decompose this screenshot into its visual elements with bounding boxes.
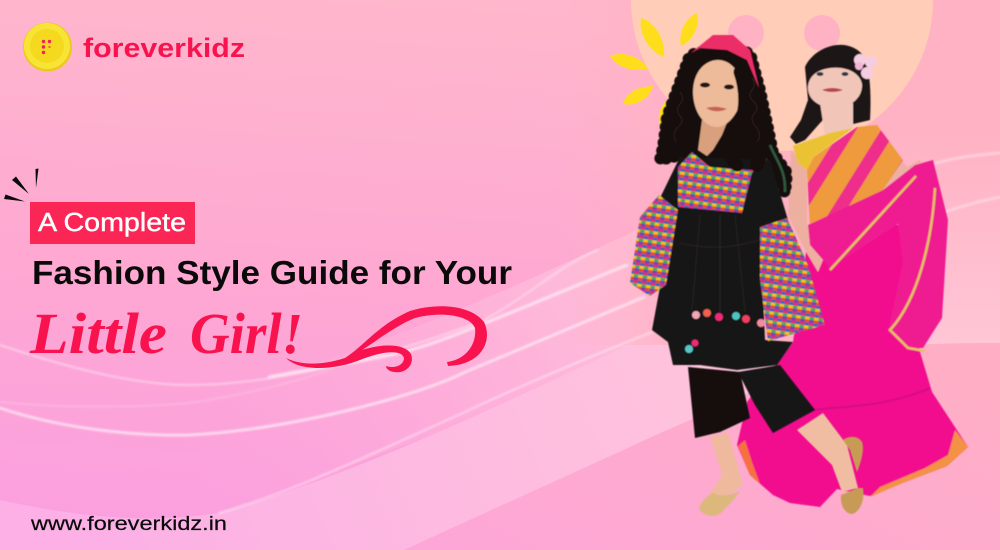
front hair curls: [686, 72, 760, 165]
face and neck: [808, 68, 862, 136]
shoe right: [841, 437, 863, 514]
hair curls back: [660, 48, 787, 193]
label: A Complete: [30, 202, 195, 244]
skirt: [737, 225, 968, 507]
skirt hem orange: [870, 430, 968, 497]
right side lower wash: [880, 130, 1000, 345]
pants right leg: [738, 365, 815, 433]
background band lower: [0, 260, 800, 550]
icon: yellow button: [23, 22, 72, 72]
yellow blouse: [793, 128, 853, 170]
logo: foreverkidz: [23, 22, 245, 72]
background white light waves: [0, 153, 1000, 513]
skirt ruffle seam: [800, 388, 930, 412]
eyes and mouth: [816, 72, 848, 92]
tunic pleats: [680, 215, 760, 312]
colorful yoke: [678, 152, 768, 213]
pink dots on sun: [728, 15, 840, 51]
left sleeve: [630, 195, 678, 296]
headband: [691, 35, 759, 88]
label: A Complete: A Complete: [38, 207, 186, 237]
eyes and mouth: [700, 82, 734, 111]
right side wash: [560, 0, 1000, 345]
icon: black spark lines: [4, 168, 38, 202]
heading: Fashion Style Guide for Your: Fashion Style Guide for Your: [32, 254, 512, 291]
peach sun circle: [631, 0, 933, 151]
gold trim: [830, 176, 935, 351]
website url: www.foreverkidz.in: [30, 514, 227, 535]
face: [693, 60, 742, 127]
waist skin: [820, 205, 892, 240]
decorative flourish: [286, 306, 487, 372]
icon: yellow leaves: [610, 13, 698, 131]
script heading: Little Girl!: [29, 301, 303, 366]
right sleeve: [760, 218, 825, 341]
script heading: Little Girl!: Little: [29, 301, 167, 366]
script heading: Little Girl!: Girl!: [190, 301, 303, 366]
green hair strand: [770, 145, 785, 192]
hair and pigtail: [790, 45, 870, 144]
logo wordmark: foreverkidz: [83, 33, 245, 63]
saree panel: [807, 125, 903, 228]
girl in pink saree: [737, 45, 968, 507]
near arm: [880, 133, 934, 208]
leg right: [797, 413, 858, 492]
flower: [854, 54, 877, 79]
background band upper: [0, 170, 760, 513]
pants left leg: [688, 367, 750, 438]
background floor shape: [404, 343, 1000, 550]
curl highlights: [674, 78, 760, 142]
far arm: [788, 150, 825, 272]
shoe left: [699, 491, 740, 516]
girl in black dress: [630, 35, 863, 516]
leg left: [706, 433, 743, 500]
neck: [698, 120, 728, 156]
black tunic: [652, 157, 793, 370]
dupatta: [808, 160, 948, 348]
tassels: [685, 309, 765, 353]
